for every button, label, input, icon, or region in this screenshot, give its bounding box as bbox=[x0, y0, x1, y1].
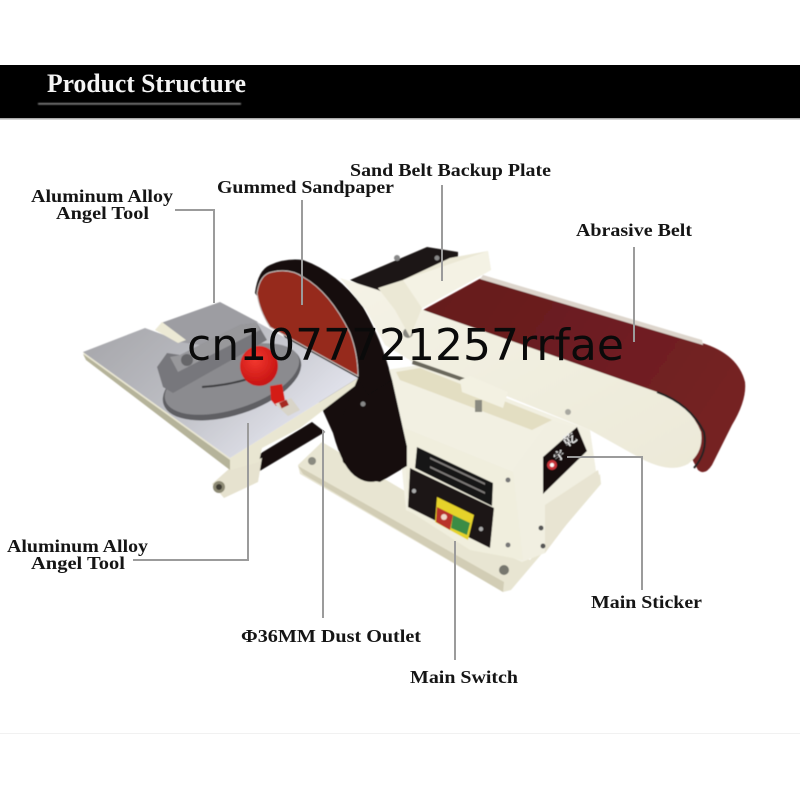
disc black rim and lower cover bbox=[255, 260, 407, 482]
label: sand belt backup plate: Sand Belt Backup Plate bbox=[350, 160, 551, 180]
title underline bbox=[38, 103, 241, 105]
motor body bbox=[385, 365, 600, 562]
red locking knob bbox=[240, 346, 278, 386]
leader lines bbox=[133, 185, 642, 660]
label: lower aluminum alloy angel tool bbox=[7, 536, 148, 573]
sand belt backup plate bbox=[378, 251, 491, 337]
watermark: cn1077721257rrfae bbox=[187, 320, 624, 371]
header band bbox=[0, 65, 800, 120]
label: abrasive belt: Abrasive Belt bbox=[576, 220, 692, 240]
label: gummed sandpaper: Gummed Sandpaper bbox=[217, 177, 394, 197]
aluminium work table bbox=[83, 302, 360, 470]
rear black housing bbox=[350, 247, 458, 292]
main sticker: 乾 bbox=[560, 430, 579, 449]
switch plate bbox=[408, 468, 494, 548]
main sticker: 宇 bbox=[551, 447, 568, 464]
mitre gauge bbox=[153, 323, 311, 436]
red pointer bbox=[270, 384, 285, 406]
title: Product Structure bbox=[47, 69, 246, 98]
label: upper aluminum alloy angel tool: Aluminum Alloy bbox=[31, 186, 173, 206]
abrasive belt bbox=[423, 275, 745, 472]
belt arm bbox=[340, 278, 705, 468]
label: upper aluminum alloy angel tool bbox=[31, 186, 173, 223]
disc cover front overlap bbox=[336, 378, 407, 482]
bottom rule bbox=[0, 733, 800, 734]
data label plate bbox=[415, 447, 493, 506]
machine base plate bbox=[298, 442, 601, 592]
product photo: belt and disc sander bbox=[83, 247, 745, 592]
gummed sandpaper disc bbox=[257, 271, 358, 376]
label: lower aluminum alloy angel tool: Aluminum Alloy bbox=[7, 536, 148, 556]
label: main switch: Main Switch bbox=[410, 667, 518, 687]
label: main sticker: Main Sticker bbox=[591, 592, 702, 612]
label: dust outlet: Φ36MM Dust Outlet bbox=[241, 626, 421, 646]
label: upper aluminum alloy angel tool: Angel Tool bbox=[56, 203, 149, 223]
table support post and rod bbox=[212, 422, 325, 498]
main sticker bbox=[543, 427, 587, 494]
label: lower aluminum alloy angel tool: Angel Tool bbox=[31, 553, 125, 573]
